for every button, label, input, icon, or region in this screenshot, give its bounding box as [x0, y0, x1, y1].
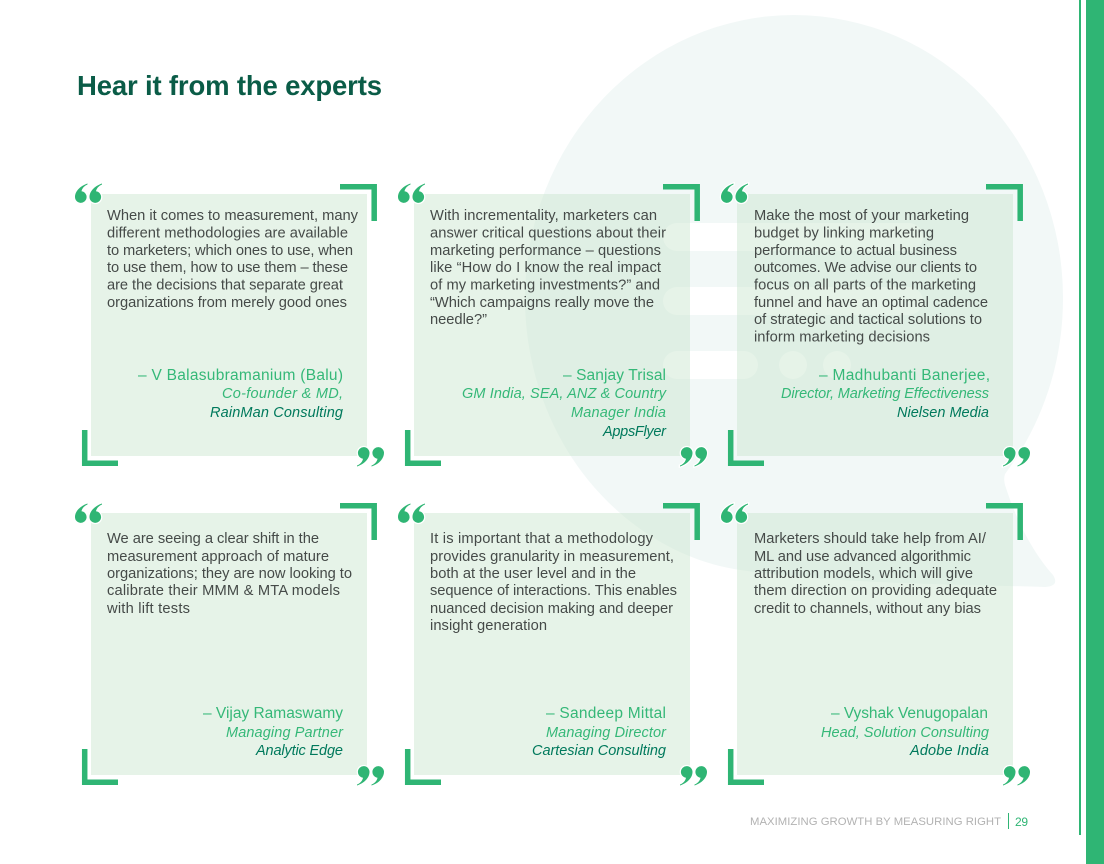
quote text: ML and use advanced algorithmic — [754, 549, 971, 565]
quote text: nuanced decision making and deeper — [430, 601, 673, 617]
quote text: Make the most of your marketing — [754, 208, 969, 224]
icon: opening and closing quote marks — [398, 184, 707, 466]
attribution: Manager India — [571, 405, 666, 421]
quote text: inform marketing decisions — [754, 330, 930, 346]
icon: opening and closing quote marks — [75, 184, 384, 466]
attribution — [203, 705, 344, 759]
attribution: – Vijay Ramaswamy — [203, 705, 343, 722]
attribution: RainMan Consulting — [210, 405, 343, 421]
quote text: insight generation — [430, 618, 547, 634]
attribution: – Madhubanti Banerjee, — [819, 367, 990, 384]
quote text: to marketers; which ones to use, when — [107, 243, 353, 259]
quote text: It is important that a methodology — [430, 531, 654, 547]
icon: corner brackets — [85, 187, 374, 463]
attribution: Co-founder & MD, — [222, 386, 343, 402]
footer: running title and page number: MAXIMIZING GROWTH BY MEASURING RIGHT — [750, 816, 1001, 828]
quote text: We are seeing a clear shift in the — [107, 531, 319, 547]
attribution: – Vyshak Venugopalan — [831, 705, 988, 722]
attribution: Managing Partner — [226, 725, 344, 741]
panel: Venugopalan quote — [721, 504, 1030, 786]
attribution: Adobe India — [909, 743, 989, 759]
footer: running title and page number: 29 — [1015, 815, 1028, 829]
quote text: performance to actual business — [754, 243, 957, 259]
attribution — [781, 367, 990, 421]
attribution: Director, Marketing Effectiveness — [781, 386, 989, 402]
quote text: answer critical questions about their — [430, 226, 666, 242]
quote text: provides granularity in measurement, — [430, 549, 674, 565]
quote text: attribution models, which will give — [754, 566, 973, 582]
quote text — [754, 208, 988, 346]
title: Hear it from the experts — [77, 70, 382, 101]
panel: Trisal quote — [398, 184, 707, 466]
footer: running title and page number — [750, 813, 1028, 829]
quote text: both at the user level and in the — [430, 566, 636, 582]
quote text: with lift tests — [106, 601, 190, 617]
quote text: funnel and have an optimal cadence — [754, 295, 988, 311]
icon: opening and closing quote marks — [721, 184, 1030, 466]
quote text: With incrementality, marketers can — [430, 208, 657, 224]
quote text: sequence of interactions. This enables — [430, 583, 677, 599]
quote text: marketing performance – questions — [430, 243, 661, 259]
quote text — [430, 531, 677, 634]
icon: corner brackets — [731, 506, 1020, 782]
quote text — [107, 208, 359, 311]
attribution: – Sandeep Mittal — [546, 705, 666, 722]
attribution: Head, Solution Consulting — [821, 725, 989, 741]
page edge bars — [1079, 0, 1104, 864]
attribution: – Sanjay Trisal — [563, 367, 666, 384]
icon: corner brackets — [731, 187, 1020, 463]
panel: Mittal quote — [398, 504, 707, 786]
icon: opening and closing quote marks — [398, 504, 707, 786]
quote text: outcomes. We advise our clients to — [754, 260, 977, 276]
icon: opening and closing quote marks — [721, 504, 1030, 786]
attribution — [462, 367, 667, 440]
quote text: of strategic and tactical solutions to — [754, 312, 982, 328]
icon: opening and closing quote marks — [75, 504, 384, 786]
quote text: of my marketing investments?” and — [430, 278, 660, 294]
panel: Balasubramanium quote — [75, 184, 384, 466]
attribution: Analytic Edge — [255, 743, 343, 759]
attribution: Cartesian Consulting — [532, 743, 666, 759]
attribution: GM India, SEA, ANZ & Country — [462, 386, 667, 402]
quote text: different methodologies are available — [107, 226, 348, 242]
quote text: organizations; they are now looking to — [107, 566, 352, 582]
attribution — [532, 705, 667, 759]
quote text — [754, 531, 997, 617]
icon: corner brackets — [408, 506, 697, 782]
quote text: “Which campaigns really move the — [430, 295, 654, 311]
quote text: needle?” — [430, 312, 487, 328]
quote text — [430, 208, 666, 328]
quote text: measurement approach of mature — [107, 549, 329, 565]
quote text: When it comes to measurement, many — [107, 208, 359, 224]
icon: corner brackets — [408, 187, 697, 463]
quote text: are the decisions that separate great — [107, 278, 343, 294]
quote text: organizations from merely good ones — [107, 295, 347, 311]
attribution: Nielsen Media — [897, 405, 989, 421]
quote text: focus on all parts of the marketing — [754, 278, 976, 294]
attribution — [138, 367, 343, 421]
icon: corner brackets — [85, 506, 374, 782]
quote text: like “How do I know the real impact — [430, 260, 661, 276]
quote text: to use them, how to use them – these — [107, 260, 348, 276]
background speech bubble — [525, 15, 1063, 587]
attribution: AppsFlyer — [602, 424, 667, 440]
quote text: Marketers should take help from AI/ — [754, 531, 987, 547]
attribution — [821, 705, 989, 759]
panel: Ramaswamy quote — [75, 504, 384, 786]
quote text: them direction on providing adequate — [754, 583, 997, 599]
attribution: – V Balasubramanium (Balu) — [138, 367, 343, 384]
quote text: budget by linking marketing — [754, 226, 934, 242]
quote text — [106, 531, 352, 617]
quote text: credit to channels, without any bias — [754, 601, 981, 617]
attribution: Managing Director — [546, 725, 667, 741]
quote text: calibrate their MMM & MTA models — [107, 583, 340, 599]
panel: Banerjee quote — [721, 184, 1030, 466]
